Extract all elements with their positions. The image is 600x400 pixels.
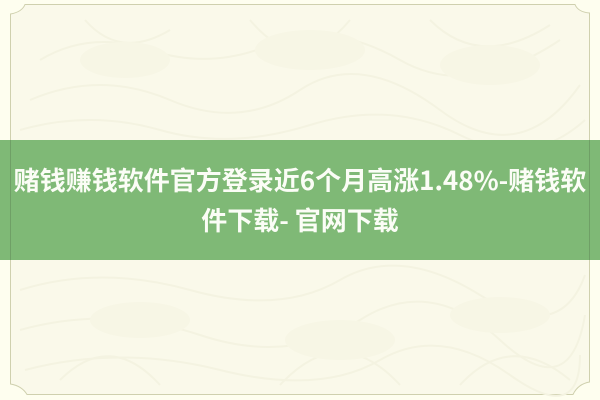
title: 件下载- 官网下载 bbox=[201, 201, 399, 238]
title: 赌钱赚钱软件官方登录近6个月高涨1.48%-赌钱软 bbox=[14, 161, 586, 198]
panel edge lines over band bbox=[10, 140, 590, 260]
title bbox=[14, 161, 586, 238]
green title band bbox=[0, 140, 600, 260]
